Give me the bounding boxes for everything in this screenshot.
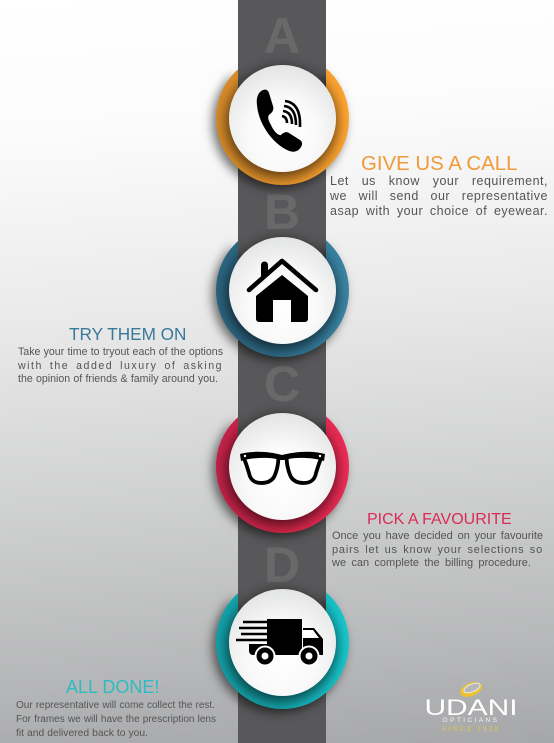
logo wordmark: UDANI <box>424 695 518 720</box>
text block: try them on: Take your time to tryout each of the options <box>18 346 223 358</box>
white disc <box>229 65 336 172</box>
text block: pick a favourite: we can complete the billing procedure. <box>332 557 531 569</box>
text block: all done: For frames we will have the prescription lens <box>16 714 216 725</box>
letter C: C <box>264 356 300 412</box>
text block: all done: fit and delivered back to you. <box>16 728 148 738</box>
heading: all done: ALL DONE! <box>66 677 159 697</box>
heading: give us a call: GIVE US A CALL <box>361 153 517 175</box>
heading: pick a favourite: PICK A FAVOURITE <box>367 511 512 528</box>
text block: give us a call: Let us know your requirement, <box>330 174 548 188</box>
text block: give us a call: we will send our representative <box>330 189 548 203</box>
step D: teal ring with truck icon <box>206 585 352 718</box>
central vertical band <box>238 0 326 743</box>
text block: give us a call <box>330 174 548 218</box>
text block: pick a favourite: Once you have decided on your favourite <box>332 530 543 542</box>
text block: all done <box>16 700 216 738</box>
letter D: D <box>264 537 300 593</box>
text block: pick a favourite: pairs let us know your selections so <box>332 544 543 556</box>
icon: delivery truck <box>236 619 323 664</box>
white disc <box>229 413 336 520</box>
text block: give us a call: asap with your choice of eyewear. <box>330 204 548 218</box>
icon: logo ellipse <box>460 682 482 697</box>
logo since line: SINCE 1938 <box>442 724 500 733</box>
text block: try them on: the opinion of friends & family around you. <box>18 373 218 385</box>
icon: house <box>246 258 318 322</box>
heading: try them on: TRY THEM ON <box>69 324 186 344</box>
white disc <box>229 237 336 344</box>
text block: try them on: with the added luxury of asking <box>18 360 223 372</box>
text block: try them on <box>18 346 223 385</box>
logo subtitle: OPTICIANS <box>443 717 499 724</box>
step B: blue ring with house icon <box>205 233 352 366</box>
letter A: A <box>264 8 300 64</box>
letter B: B <box>264 184 300 240</box>
icon: glasses <box>240 452 325 485</box>
text block: pick a favourite <box>332 530 543 569</box>
text block: all done: Our representative will come collect the rest. <box>16 700 215 711</box>
icon: phone <box>256 90 302 152</box>
step C: red ring with glasses icon <box>205 409 352 542</box>
white disc <box>229 589 336 696</box>
logo: Udani Opticians <box>424 682 518 733</box>
step A: orange ring with phone icon <box>205 61 352 194</box>
